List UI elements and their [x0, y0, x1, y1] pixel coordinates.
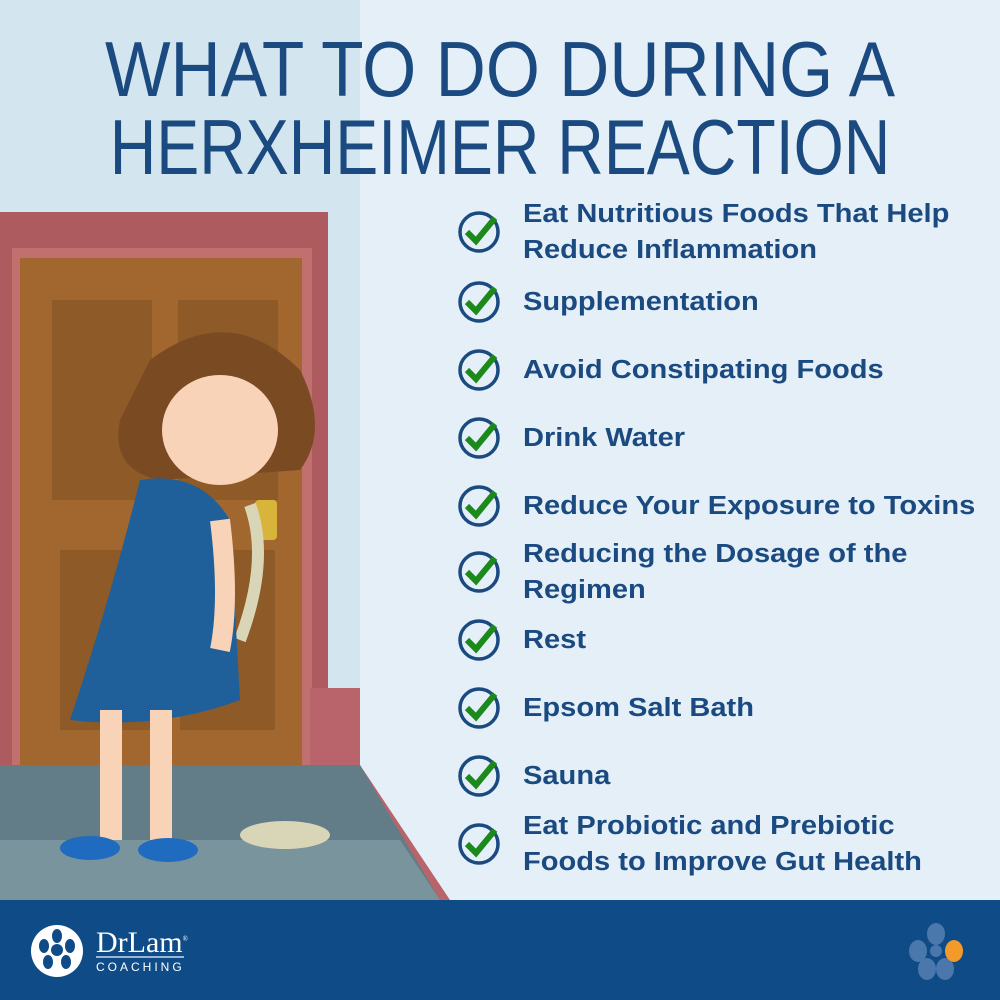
item 9 [458, 755, 610, 797]
logo: DrLam Coaching: DrLam® [96, 926, 188, 959]
item 1 [458, 200, 949, 264]
item 5 [458, 485, 975, 527]
item 3 [458, 349, 884, 391]
item 4 [458, 417, 685, 459]
item 6 [458, 540, 907, 604]
item 5: Reduce Your Exposure to Toxins [523, 492, 975, 520]
item 7: Rest [523, 626, 586, 654]
item 6: Reducing the Dosage of the [523, 540, 907, 568]
item 2: Supplementation [523, 288, 759, 316]
illustration: sick girl at door [0, 212, 450, 900]
logo: DrLam Coaching [31, 925, 188, 977]
item 8 [458, 687, 754, 729]
item 1: Reduce Inflammation [523, 236, 817, 264]
item 7 [458, 619, 586, 661]
title: WHAT TO DO DURING A [105, 27, 895, 113]
title: HERXHEIMER REACTION [110, 105, 890, 191]
item 9: Sauna [523, 762, 610, 790]
item 4: Drink Water [523, 424, 685, 452]
item 3: Avoid Constipating Foods [523, 356, 884, 384]
icon: flower [909, 923, 963, 980]
item 2 [458, 281, 759, 323]
item 1: Eat Nutritious Foods That Help [523, 200, 949, 228]
item 10: Eat Probiotic and Prebiotic [523, 812, 895, 840]
item 8: Epsom Salt Bath [523, 694, 754, 722]
item 6: Regimen [523, 576, 646, 604]
footer bar [0, 900, 1000, 1000]
title [105, 27, 895, 191]
left wall background [0, 0, 360, 900]
item 10 [458, 812, 922, 876]
checklist [458, 200, 975, 876]
item 10: Foods to Improve Gut Health [523, 848, 922, 876]
logo: DrLam Coaching: COACHING [96, 960, 185, 974]
